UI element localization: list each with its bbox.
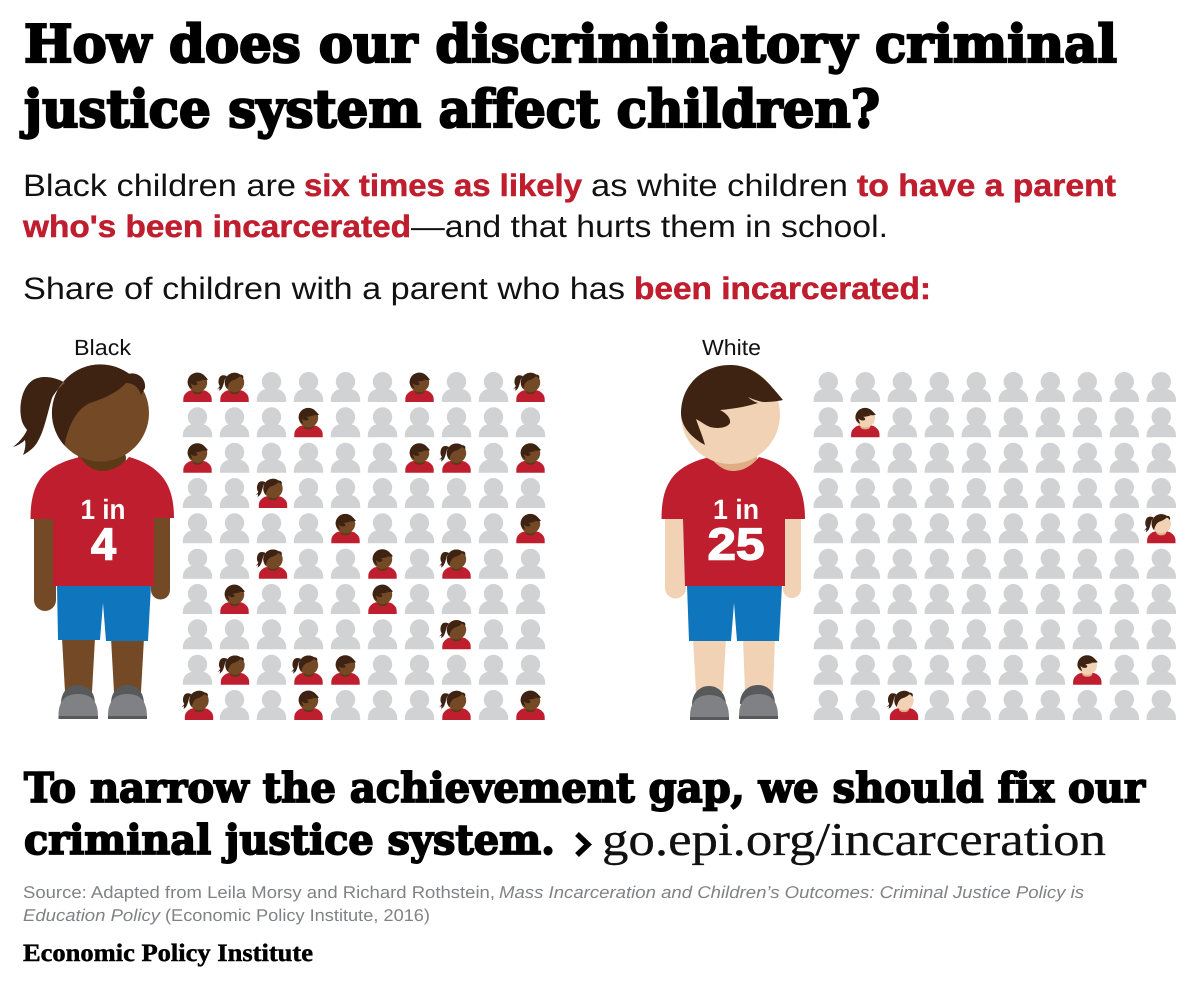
t-shirt xyxy=(30,457,174,586)
shirt number: 1 in 25 xyxy=(708,494,764,570)
panel: Black children xyxy=(13,335,545,720)
hair with ponytail xyxy=(13,364,145,455)
shoes xyxy=(58,685,147,719)
head xyxy=(681,365,780,464)
chart subtitle: been incarcerated: xyxy=(634,271,931,306)
figure: Black child, 1 in 4 xyxy=(13,364,174,719)
shirt number: 1 in 4 xyxy=(80,494,126,570)
hair xyxy=(681,365,783,445)
title: justice system affect children? xyxy=(20,79,880,140)
neck xyxy=(709,444,757,472)
neck xyxy=(78,444,126,472)
label: Black: Black xyxy=(74,335,132,360)
intro text xyxy=(22,168,1116,244)
intro text: six times as likely xyxy=(304,168,583,203)
shirt number: 1 in 25: 1 in xyxy=(713,494,759,525)
head xyxy=(52,364,149,462)
title: How does our discriminatory criminal xyxy=(24,14,1117,75)
shirt number: 1 in 4: 4 xyxy=(91,518,116,570)
legs xyxy=(693,638,775,692)
intro text: —and that hurts them in school. xyxy=(411,209,888,244)
legs xyxy=(62,638,144,692)
intro text: as white children xyxy=(591,168,848,203)
t-shirt xyxy=(662,457,805,586)
icon grid: White children, 4 of 100 highlighted xyxy=(814,372,1176,720)
silhouettes: children without incarcerated parent xyxy=(814,372,1176,720)
arms xyxy=(665,515,801,598)
call to action heading: To narrow the achievement gap, we should fix our xyxy=(24,764,1146,812)
shirt number: 1 in 4: 1 in xyxy=(80,494,126,525)
icon grid: Black children, 25 of 100 highlighted xyxy=(182,372,545,720)
arrow: chevron xyxy=(577,834,588,855)
highlighted children with incarcerated parent xyxy=(182,373,545,720)
source note: Source: Adapted from Leila Morsy and Richard Rothstein, xyxy=(23,883,495,902)
intro text: Black children are xyxy=(23,168,296,203)
source note: Education Policy xyxy=(23,906,162,925)
arms xyxy=(34,515,170,611)
shorts xyxy=(687,585,782,641)
intro text: who's been incarcerated xyxy=(22,209,411,244)
link: go.epi.org/incarceration: go.epi.org/incarceration xyxy=(602,814,1106,866)
intro text: to have a parent xyxy=(857,168,1116,203)
shorts xyxy=(57,585,151,641)
call to action heading xyxy=(24,764,1146,864)
source note xyxy=(23,883,1085,925)
shirt number: 1 in 25: 25 xyxy=(708,518,764,570)
title xyxy=(20,14,1117,140)
panel: White children xyxy=(662,335,1176,720)
shoes xyxy=(690,685,778,720)
label: White: White xyxy=(702,335,761,360)
silhouettes: children without incarcerated parent xyxy=(183,372,545,720)
logo: Economic Policy Institute: Economic Policy Institute xyxy=(23,940,313,967)
source note: (Economic Policy Institute, 2016) xyxy=(165,906,430,925)
chart subtitle xyxy=(23,271,931,306)
figure: White child, 1 in 25 xyxy=(662,365,805,720)
highlighted children with incarcerated parent xyxy=(851,408,1176,720)
call to action heading: criminal justice system. xyxy=(24,816,555,864)
chart subtitle: Share of children with a parent who has xyxy=(23,271,625,306)
source note: Mass Incarceration and Children’s Outcomes: Criminal Justice Policy is xyxy=(499,883,1085,902)
